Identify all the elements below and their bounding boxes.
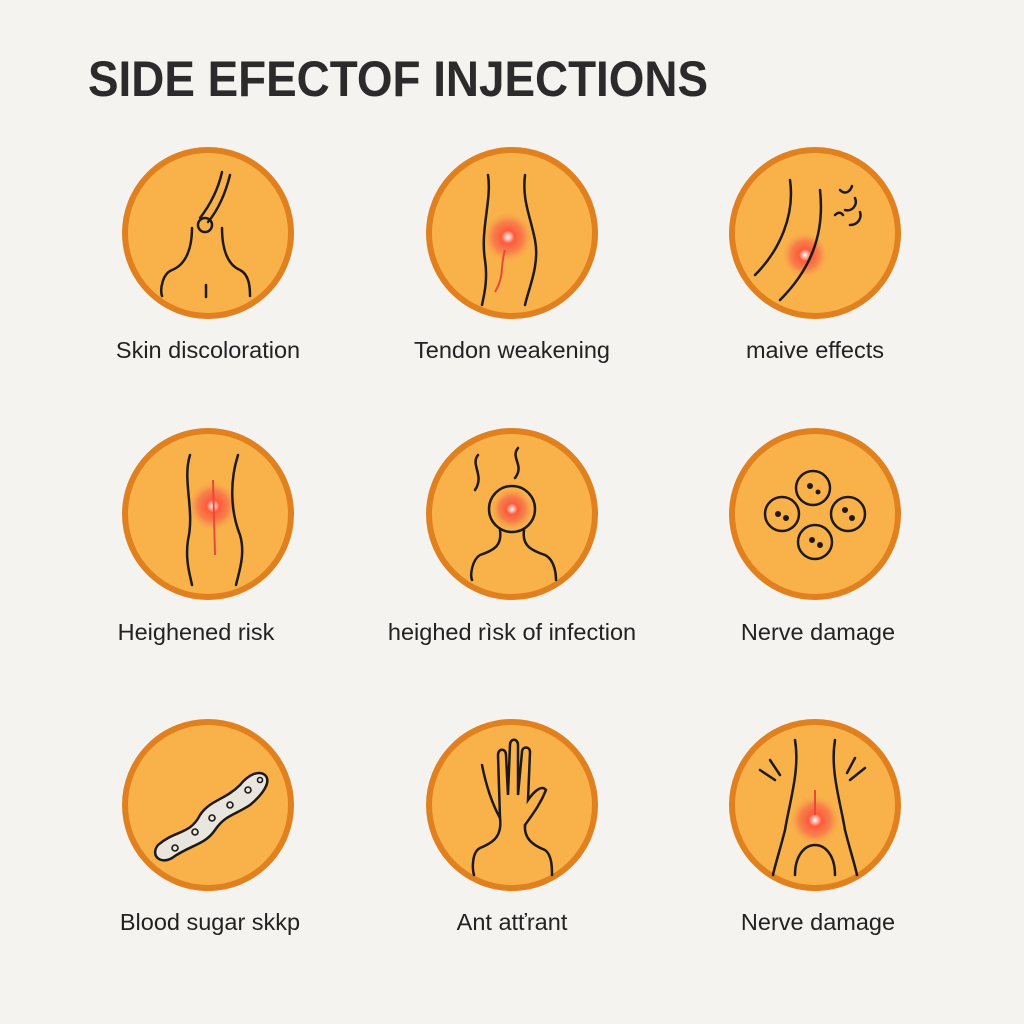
panel: heighed risk of infection: heighed rìsk of infection — [388, 619, 636, 645]
panel: blood sugar — [120, 722, 300, 935]
panel: heighed risk of infection — [388, 431, 636, 645]
panel: maive effects: maive effects — [746, 337, 884, 363]
title: SIDE EFECTOF INJECTIONS — [88, 51, 708, 107]
panel: ant atrant: Ant atťrant — [457, 909, 568, 935]
panel: ant atrant — [429, 722, 595, 935]
panel: heighened risk — [118, 431, 291, 645]
label: Skin discoloration — [116, 337, 300, 363]
panel: blood sugar: Blood sugar skkp — [120, 909, 300, 935]
panel: heighened risk: Heighened risk — [118, 619, 275, 645]
panel: nerve damage: Nerve damage — [741, 909, 895, 935]
panel: nerve damage — [732, 722, 898, 935]
panel: skin discoloration — [116, 150, 300, 363]
panel: tendon weakening — [414, 150, 610, 363]
panel: maive effects — [732, 150, 898, 363]
panel: nerve damage cells: Nerve damage — [741, 619, 895, 645]
panel: tendon weakening: Tendon weakening — [414, 337, 610, 363]
panel: nerve damage cells — [732, 431, 898, 645]
